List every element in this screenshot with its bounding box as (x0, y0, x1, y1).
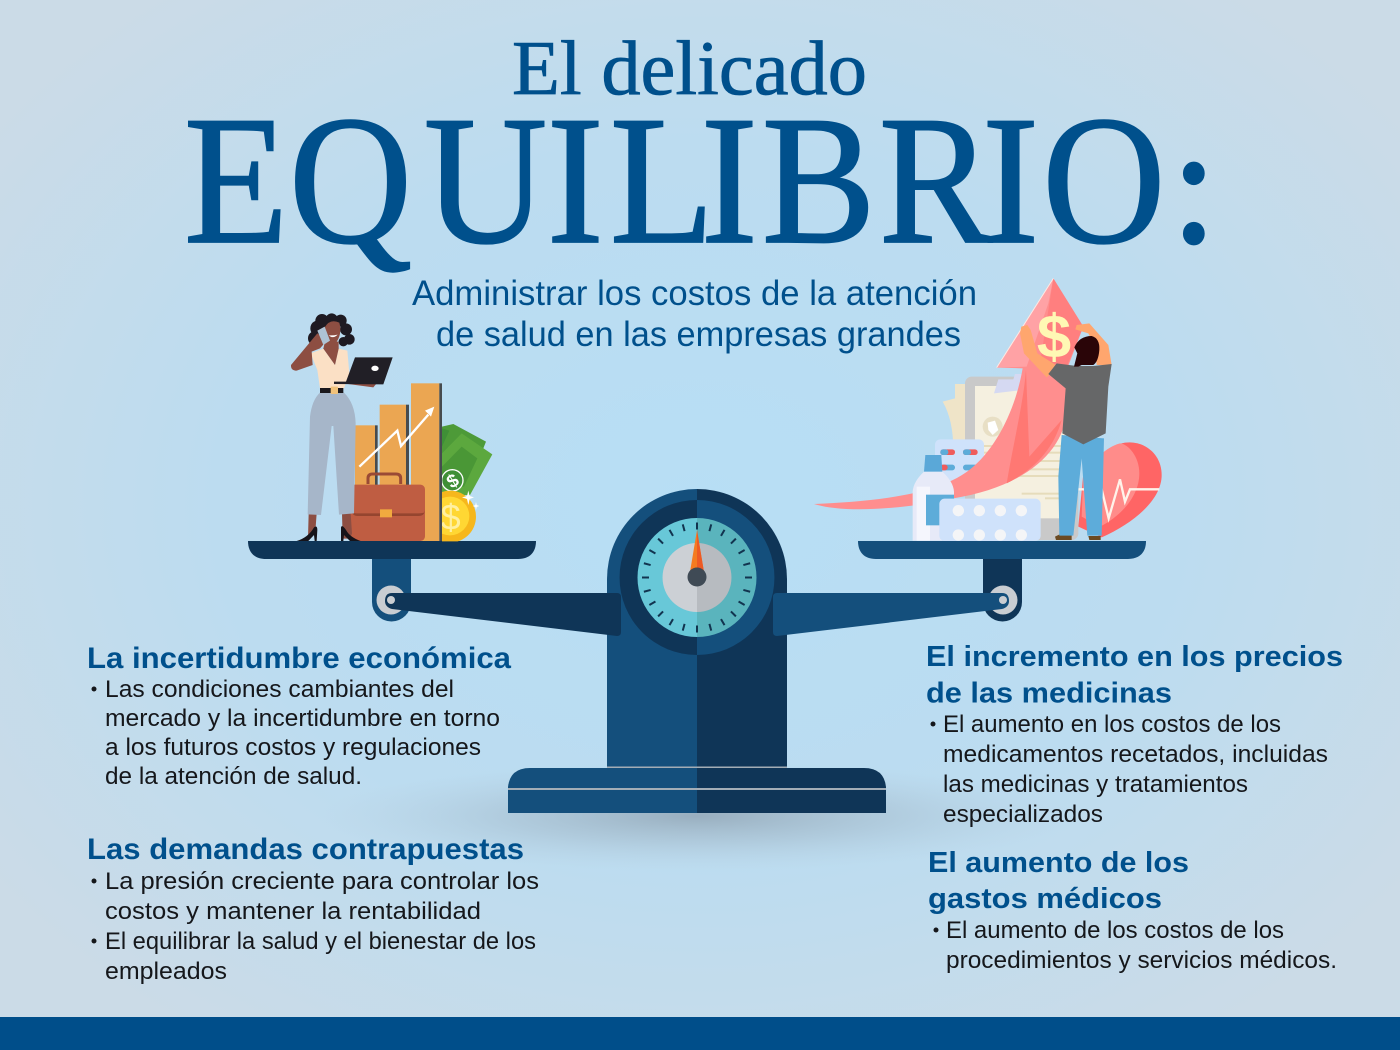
woman arm (291, 333, 327, 371)
sparkles (462, 491, 479, 510)
bar 2 (380, 405, 406, 541)
base right (697, 768, 886, 813)
bottle cap (924, 455, 942, 472)
laptop (334, 357, 393, 384)
laptop logo (371, 366, 379, 371)
document lines (983, 445, 1063, 499)
bar 3 (411, 383, 439, 541)
rising arrow (814, 278, 1083, 509)
footer bar (0, 1017, 1400, 1050)
dial ring right (697, 500, 774, 655)
bar 1 (355, 425, 375, 541)
growth arrow head (425, 407, 434, 417)
man right arm (1075, 323, 1112, 365)
right pivot pin (999, 596, 1007, 604)
block: demandas contrapuestas: Las demandas contrapuestas (87, 833, 524, 866)
belt buckle (331, 387, 338, 394)
title: El delicado (512, 25, 867, 111)
dial face right (697, 518, 756, 637)
front blister (939, 499, 1041, 541)
man left arm (1020, 325, 1058, 377)
block: incremento medicinas: medicamentos recetados, incluidas (943, 741, 1328, 768)
money: $ (443, 469, 463, 492)
coin: $ (441, 496, 461, 537)
arrow shade (1007, 370, 1062, 483)
right pivot (988, 586, 1018, 614)
block: incertidumbre economica: de la atención de salud. (105, 763, 362, 790)
dial ring left (620, 500, 697, 655)
block: incertidumbre economica: Las condiciones cambiantes del (105, 676, 454, 703)
left pivot (376, 586, 406, 614)
tower right half (697, 489, 787, 767)
balance scale (248, 489, 1146, 813)
hair (308, 313, 355, 346)
bottle shine (917, 487, 930, 541)
block: demandas contrapuestas: costos y mantener la rentabilidad (105, 898, 481, 925)
arrow head shade (1040, 278, 1083, 367)
block: gastos medicos: El aumento de los costos de los (946, 917, 1284, 944)
back blister (935, 439, 984, 484)
block: demandas contrapuestas: empleados (105, 958, 227, 985)
block: demandas contrapuestas: La presión creciente para controlar los (105, 868, 539, 895)
block: gastos medicos: El aumento de los (928, 847, 1189, 879)
woman far arm (343, 373, 377, 387)
seal mark (988, 421, 998, 435)
illustration: woman with chart (291, 313, 492, 543)
briefcase flap (352, 509, 425, 516)
arrow head edge (997, 278, 1053, 368)
clip (994, 374, 1023, 393)
title: : (1173, 95, 1215, 277)
block: incremento medicinas: de las medicinas (926, 678, 1172, 710)
man hair (1074, 336, 1099, 367)
subtitle: de salud en las empresas grandes (436, 315, 961, 354)
capsules (940, 449, 978, 470)
base left (508, 768, 697, 813)
man jeans (1058, 435, 1104, 536)
bottle (913, 472, 954, 541)
block: gastos medicos (928, 847, 1337, 974)
briefcase (350, 485, 425, 541)
dollar sign: $ (1037, 302, 1071, 371)
block: incertidumbre economica: mercado y la incertidumbre en torno (105, 705, 500, 732)
block: incremento medicinas: El incremento en los precios (926, 641, 1343, 673)
block: demandas contrapuestas (87, 833, 539, 985)
money (442, 424, 492, 495)
heart highlight (1082, 443, 1139, 527)
briefcase clasp (380, 509, 392, 517)
tower left half (607, 489, 697, 767)
block: incremento medicinas: las medicinas y tratamientos (943, 771, 1248, 798)
dial face left (638, 518, 697, 637)
bar 2 side (406, 405, 409, 541)
woman blouse (311, 349, 349, 388)
woman pants (308, 393, 356, 515)
block: incremento medicinas (926, 641, 1343, 828)
left pan (248, 541, 536, 559)
right arm (773, 593, 1009, 636)
briefcase handle (368, 474, 401, 484)
dial needle (690, 530, 704, 572)
left pivot pin (387, 596, 395, 604)
woman shoes (297, 526, 361, 541)
dial center left (663, 543, 697, 612)
pills (953, 505, 1027, 541)
dial needle highlight (697, 530, 704, 572)
bar 1 side (375, 425, 378, 541)
block: incremento medicinas: El aumento en los costos de los (943, 711, 1281, 738)
block: demandas contrapuestas: El equilibrar la salud y el bienestar de los (105, 928, 536, 955)
base top line (607, 766, 787, 768)
subtitle: Administrar los costos de la atención (412, 274, 977, 313)
man shirt (1048, 363, 1112, 444)
heart (1078, 442, 1162, 537)
woman belt (320, 388, 343, 393)
growth arrow (359, 415, 428, 467)
tablet (965, 377, 1078, 540)
block: incertidumbre economica: a los futuros costos y regulaciones (105, 734, 481, 761)
block: gastos medicos: gastos médicos (928, 883, 1162, 915)
title: EQUILIBRIO (184, 79, 1166, 282)
man shoes (1055, 533, 1101, 540)
dial ticks (642, 522, 752, 632)
woman neck (323, 342, 339, 365)
scale left post (372, 556, 411, 622)
face (325, 321, 340, 344)
block: incertidumbre economica (87, 642, 511, 790)
bottle label (926, 495, 954, 525)
block: gastos medicos: procedimientos y servicios médicos. (946, 947, 1337, 974)
base shadow (317, 761, 1077, 871)
heart pulse line (1078, 479, 1159, 518)
document seal (983, 417, 1003, 437)
right pan (858, 541, 1146, 559)
base line (508, 788, 886, 790)
left arm (385, 593, 621, 636)
dial center right (697, 543, 731, 612)
right column: text (926, 641, 1343, 974)
smile (329, 335, 338, 337)
subtitle (412, 274, 977, 354)
coin (442, 490, 476, 542)
scale right post (983, 556, 1022, 622)
block: incremento medicinas: especializados (943, 801, 1103, 828)
phone (317, 327, 330, 345)
woman legs (308, 513, 352, 539)
block: incertidumbre economica: La incertidumbre económica (87, 642, 511, 675)
document (975, 386, 1067, 518)
bar 3 side (439, 383, 442, 541)
arrow head light (997, 278, 1053, 368)
back paper (943, 384, 967, 450)
dial hub (688, 568, 706, 586)
left column: text (87, 642, 539, 985)
illustration: man with rising cost arrow (814, 278, 1162, 541)
